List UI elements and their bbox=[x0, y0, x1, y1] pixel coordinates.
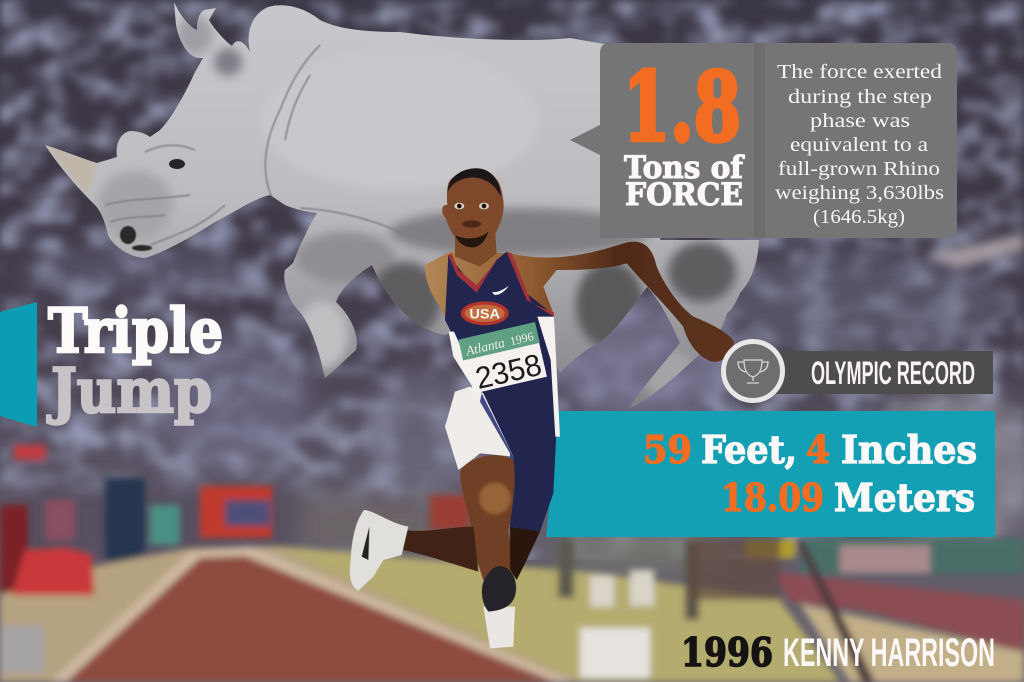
white side panel bbox=[449, 317, 560, 437]
icon: trophy badge bbox=[724, 342, 782, 400]
tons of force label: FORCE bbox=[625, 177, 743, 213]
description text: phase was bbox=[810, 110, 910, 132]
eyes and mouth bbox=[454, 203, 489, 228]
description text: weighing 3,630lbs bbox=[775, 182, 944, 204]
front leg bbox=[460, 455, 515, 580]
skin folds bbox=[105, 45, 405, 245]
record distance text: Meters bbox=[834, 475, 975, 520]
record distance text: Inches bbox=[841, 427, 977, 472]
rear leg bbox=[403, 527, 478, 572]
record distance text: Feet, bbox=[701, 427, 797, 472]
title: Triple Jump bbox=[0, 296, 223, 427]
race bib: 2358 bbox=[472, 348, 545, 396]
hair bbox=[448, 168, 501, 197]
description text: during the step bbox=[788, 86, 932, 108]
knee highlight bbox=[479, 482, 511, 514]
description text bbox=[775, 61, 944, 228]
tons of force label: Tons of bbox=[624, 150, 745, 186]
description text: equivalent to a bbox=[790, 134, 928, 156]
front foot bbox=[483, 607, 515, 648]
singlet bbox=[445, 252, 557, 532]
goatee bbox=[455, 232, 488, 247]
USA badge: USA bbox=[469, 305, 500, 321]
crowd front row colours bbox=[800, 538, 1024, 574]
description text: The force exerted bbox=[777, 61, 942, 83]
teal record panel bbox=[546, 411, 995, 537]
neck and head bbox=[455, 227, 497, 267]
big number: 1.8 bbox=[623, 52, 741, 163]
crowd front row bbox=[0, 485, 300, 565]
description text: (1646.5kg) bbox=[813, 206, 905, 228]
ground base bbox=[0, 546, 800, 682]
title: Triple Jump: Jump bbox=[47, 356, 212, 427]
nostril and mouth bbox=[120, 226, 152, 251]
nike swoosh bbox=[492, 286, 509, 295]
title: Triple Jump: Triple bbox=[48, 296, 223, 367]
olympic record label bbox=[755, 351, 993, 394]
athlete: Kenny Harrison bbox=[350, 168, 734, 648]
callout panel: 1.8 tons of force bbox=[570, 43, 957, 238]
race bib: 1996 bbox=[509, 329, 535, 348]
USA badge bbox=[461, 301, 509, 325]
eye bbox=[169, 159, 185, 169]
year and athlete name bbox=[681, 630, 995, 676]
runway bbox=[50, 546, 575, 682]
tons of force label bbox=[624, 150, 745, 213]
year and athlete name: 1996 bbox=[681, 630, 773, 676]
rhino bbox=[45, 2, 759, 408]
record distance text: 59 bbox=[643, 427, 692, 472]
horn shading bbox=[48, 146, 97, 193]
arm and shoulders bbox=[425, 242, 734, 362]
record distance text bbox=[643, 427, 977, 520]
teal flag bbox=[0, 302, 37, 427]
record distance text: 18.09 bbox=[721, 475, 824, 520]
rear shoe and sock bbox=[350, 510, 408, 591]
singlet trim bbox=[448, 252, 554, 317]
trackside objects bbox=[12, 547, 94, 595]
crowd right green bbox=[745, 540, 795, 558]
race bib bbox=[458, 322, 548, 398]
record distance text: 4 bbox=[806, 427, 830, 472]
white shorts bbox=[445, 387, 513, 470]
race bib: Atlanta bbox=[463, 335, 506, 359]
description text: full-grown Rhino bbox=[778, 158, 940, 180]
